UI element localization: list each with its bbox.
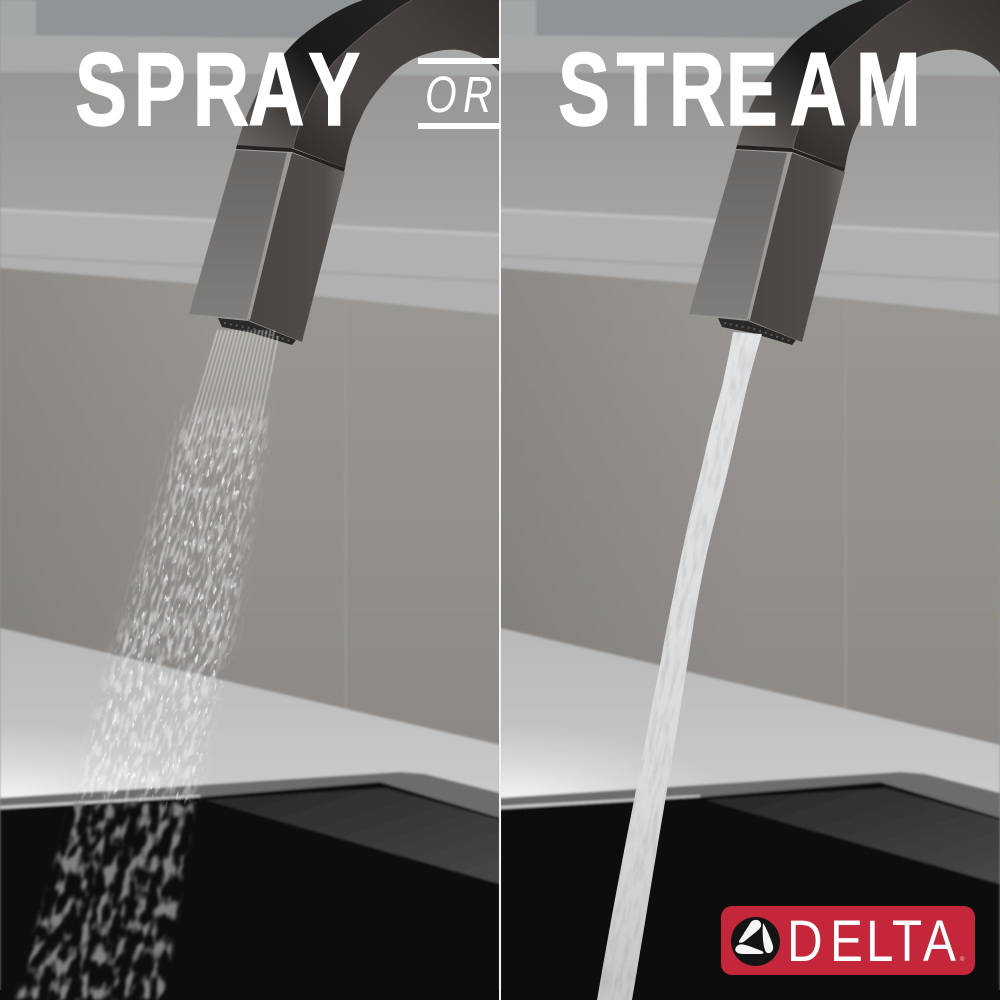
heading: STREAM: STREAM	[558, 32, 921, 148]
stream texture	[600, 332, 757, 1000]
heading: SPRAY: SPRAY	[75, 32, 360, 148]
divider between panels	[499, 0, 501, 1000]
sparkles on the spray	[77, 414, 268, 808]
panel: spray photo	[0, 0, 500, 1000]
photo: kitchen wall, sink and faucet (left)	[0, 0, 500, 1000]
icon: Delta triangle mark	[731, 917, 780, 966]
heading: OR between two rules	[418, 58, 500, 129]
logo: Delta	[721, 906, 975, 975]
wordmark: DELTA: DELTA	[787, 909, 956, 974]
panel: stream photo	[472, 0, 1000, 1000]
spray water droplets	[14, 329, 280, 1000]
large droplets over the dark sink	[14, 800, 196, 1000]
stream body	[597, 332, 762, 1000]
photo: kitchen wall, sink and faucet (right)	[500, 0, 1000, 1000]
fine droplets mid-air	[117, 404, 270, 656]
registered mark: ®	[960, 956, 965, 963]
heading: OR between two rules: OR	[425, 66, 492, 123]
solid water stream	[597, 332, 762, 1000]
larger droplets above the counter	[80, 614, 230, 808]
thin spray jets near the aerator	[176, 330, 278, 470]
